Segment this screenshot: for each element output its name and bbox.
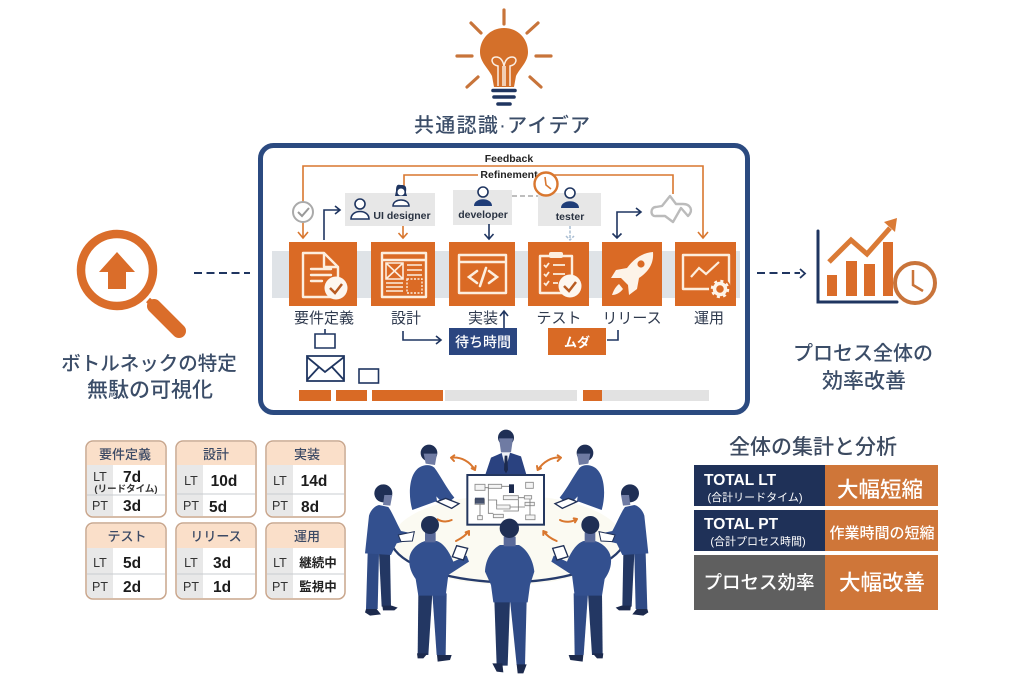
step: operations — [675, 242, 736, 327]
callout: muda waste: ムダ — [564, 335, 590, 350]
row: total PT: (合計プロセス時間) — [710, 534, 806, 548]
step: requirements — [289, 242, 357, 327]
refinement loop — [404, 169, 673, 194]
card: implementation: 実装 — [294, 447, 320, 462]
step: test — [528, 242, 589, 327]
card: release: 1d — [213, 579, 231, 596]
card: implementation: 14d — [301, 473, 327, 490]
card: test: テスト — [107, 529, 147, 544]
illustration: team around table — [365, 430, 648, 673]
icon: light bulb — [457, 10, 551, 104]
row: total PT: TOTAL PT — [704, 516, 779, 533]
step: release: リリース — [602, 310, 662, 327]
role: UI designer — [345, 185, 435, 226]
card: requirements — [86, 441, 166, 517]
arrow to waiting time — [403, 331, 441, 344]
dashed arrow right — [757, 269, 805, 278]
role: tester: tester — [556, 211, 584, 223]
card: design: PT — [183, 499, 199, 513]
panel: stage cards — [86, 441, 345, 599]
card: requirements: LT — [93, 470, 107, 484]
card: requirements: 要件定義 — [99, 447, 151, 462]
person: front right — [551, 516, 611, 662]
arrow up to implementation — [500, 311, 508, 328]
text: bottleneck: ボトルネックの特定 — [61, 353, 237, 375]
refinement loop: Refinement — [480, 169, 538, 181]
card: operations: 運用 — [294, 529, 320, 544]
card: requirements: PT — [92, 499, 108, 513]
step: release — [602, 242, 662, 327]
row: process efficiency: プロセス効率 — [703, 572, 815, 593]
icon: envelope — [307, 356, 344, 381]
role: developer: developer — [458, 209, 508, 221]
role: developer — [453, 187, 512, 225]
card: design: 5d — [209, 499, 227, 516]
timeline bar — [299, 390, 709, 401]
card: requirements: (リードタイム) — [94, 483, 158, 495]
text: bottleneck: 無駄の可視化 — [87, 379, 213, 402]
orange collaboration arrows — [438, 455, 577, 541]
card: implementation: PT — [272, 499, 288, 513]
callout: muda waste — [548, 328, 606, 355]
person: front left — [409, 516, 469, 662]
heading: shared understanding: 共通認識·アイデア — [414, 113, 590, 137]
row: process efficiency — [694, 555, 938, 610]
step: design: 設計 — [391, 310, 421, 327]
card: release: PT — [183, 580, 199, 594]
icon: growth chart — [818, 218, 935, 303]
process background band — [272, 251, 740, 298]
person: back right — [555, 445, 604, 510]
card: operations — [266, 523, 345, 599]
heading: totals: 全体の集計と分析 — [729, 436, 897, 459]
card: release: LT — [184, 556, 198, 570]
card: test: 2d — [123, 579, 141, 596]
row: total PT: 作業時間の短縮 — [829, 525, 935, 542]
card: requirements: 3d — [123, 498, 141, 515]
card: implementation: 8d — [301, 499, 319, 516]
card: test: 5d — [123, 555, 141, 572]
panel: process flow — [260, 146, 748, 412]
card: requirements: 7d — [123, 469, 141, 486]
card: design: 設計 — [203, 447, 229, 462]
callout: waiting time: 待ち時間 — [455, 334, 511, 350]
person: back left — [410, 445, 459, 510]
step: implementation — [449, 242, 515, 327]
row: total LT: (合計リードタイム) — [707, 490, 803, 504]
row: total LT: TOTAL LT — [704, 472, 777, 489]
connector arrows — [324, 206, 641, 240]
card: operations: LT — [273, 556, 287, 570]
card: implementation — [266, 441, 345, 517]
person: top presenter — [485, 430, 527, 476]
feedback loop — [298, 153, 708, 238]
step: implementation: 実装 — [468, 310, 498, 327]
step: operations: 運用 — [694, 310, 724, 327]
card: release: 3d — [213, 555, 231, 572]
icon: clock — [534, 172, 558, 196]
card: design: LT — [184, 474, 198, 488]
person: left side — [365, 484, 414, 616]
row: process efficiency: 大幅改善 — [839, 571, 925, 595]
row: total PT — [694, 510, 938, 551]
icon: small box top — [315, 329, 335, 348]
step: test: テスト — [536, 310, 582, 327]
card: test: PT — [92, 580, 108, 594]
role: UI designer: UI designer — [373, 210, 431, 222]
dashed link developer to tester — [512, 195, 538, 197]
panel: totals analysis — [694, 436, 938, 610]
step: design — [371, 242, 435, 327]
card: design — [176, 441, 256, 517]
round table — [393, 495, 623, 585]
card: test — [86, 523, 166, 599]
icon: gray loop glyph — [652, 196, 691, 222]
person: right side — [599, 484, 648, 616]
card: operations: 継続中 — [299, 555, 337, 570]
person: front centre — [485, 519, 534, 673]
feedback loop: Feedback — [485, 153, 533, 165]
callout: waiting time — [449, 328, 517, 355]
icon: gray check — [293, 202, 313, 222]
text: overall efficiency — [793, 342, 933, 393]
step: requirements: 要件定義 — [294, 310, 354, 327]
card: release: リリース — [190, 529, 242, 544]
role: tester — [538, 188, 601, 226]
card: operations: PT — [272, 580, 288, 594]
row: total LT — [694, 465, 938, 506]
shared screen — [467, 475, 544, 525]
bracket from release to muda — [607, 330, 618, 340]
card: test: LT — [93, 556, 107, 570]
card: design: 10d — [211, 473, 237, 490]
row: total LT: 大幅短縮 — [837, 478, 923, 502]
dashed connector left — [194, 272, 250, 274]
card: implementation: LT — [273, 474, 287, 488]
icon: small box bottom — [359, 369, 378, 383]
card: operations: 監視中 — [299, 579, 337, 594]
text: bottleneck — [61, 353, 237, 402]
text: overall efficiency: プロセス全体の — [793, 342, 933, 365]
card: release — [176, 523, 256, 599]
text: overall efficiency: 効率改善 — [822, 370, 906, 393]
icon: magnifier — [81, 234, 179, 331]
